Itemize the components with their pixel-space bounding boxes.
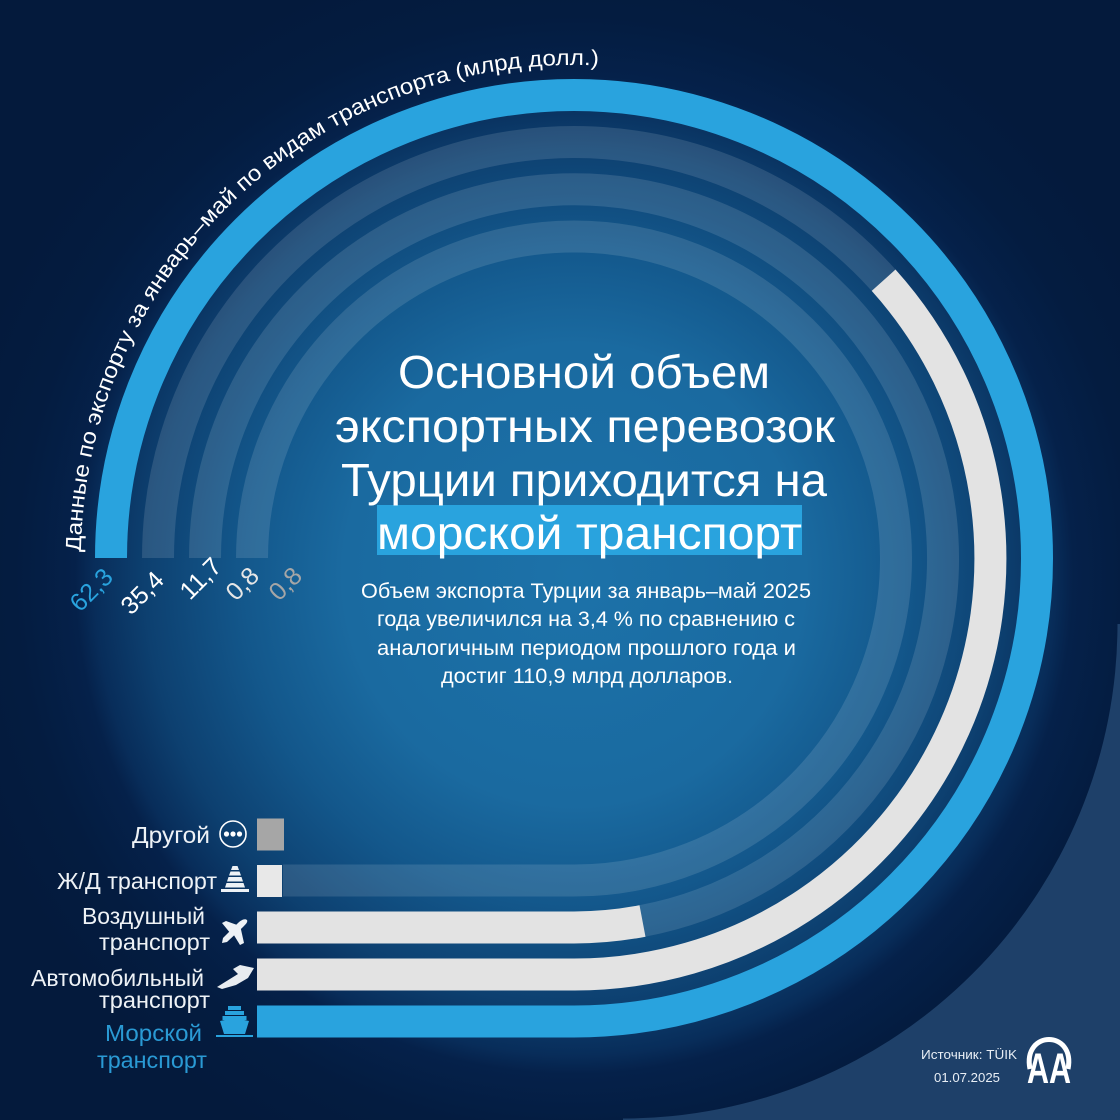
value: air: 11,7 (174, 552, 227, 605)
title line 2: экспортных перевозок (335, 400, 836, 452)
title (335, 346, 836, 559)
track: air (205, 189, 943, 921)
label: sea (97, 1020, 207, 1073)
value: automobile: 35,4 (115, 566, 170, 620)
logo: AA (1027, 1040, 1071, 1093)
bar: other 0,8 (257, 818, 284, 850)
label: air: транспорт (99, 929, 210, 955)
source text: Источник: TÜIK (921, 1047, 1017, 1062)
chart: radial bar chart (111, 95, 1037, 1022)
logo: AA: AA (1027, 1045, 1071, 1093)
bar: sea transport 62,3 (111, 95, 1037, 1022)
label: rail: Ж/Д транспорт (57, 868, 217, 894)
track: rail (252, 237, 896, 881)
icon: railway (221, 866, 249, 892)
title line 3: Турции приходится на (341, 454, 827, 506)
bar: automobile transport 35,4 (257, 280, 990, 975)
label: air: Воздушный (82, 903, 205, 929)
label: automobile: транспорт (99, 987, 210, 1013)
description line 3: аналогичным периодом прошлого года и (377, 637, 796, 660)
icon: road (217, 965, 254, 989)
title highlight (377, 505, 802, 555)
icon: plane (222, 919, 247, 945)
value: sea: 62,3 (64, 563, 119, 617)
bar: rail transport 0,8 (257, 865, 282, 897)
description line 2: года увеличился на 3,4 % по сравнению с (377, 608, 795, 631)
title line 4: морской транспорт (377, 507, 802, 559)
title line 1: Основной объем (398, 346, 770, 398)
date: 01.07.2025 (934, 1070, 1000, 1085)
value: rail: 0,8 (220, 562, 265, 606)
curved chart caption: Данные по экспорту за январь–май по видам транспорта (млрд долл.) (66, 49, 598, 552)
label: air (82, 903, 210, 955)
label: sea: Морской (105, 1020, 202, 1046)
bar: air transport 11,7 (257, 921, 642, 928)
description line 1: Объем экспорта Турции за январь–май 2025 (361, 580, 811, 603)
label: automobile (31, 965, 210, 1013)
description line 4: достиг 110,9 млрд долларов. (441, 665, 733, 688)
values rotated (64, 552, 308, 620)
label: other: Другой (132, 822, 210, 848)
track: automobile (158, 142, 884, 558)
value: other: 0,8 (263, 562, 308, 606)
label: automobile: Автомобильный (31, 965, 204, 991)
legend labels (31, 822, 217, 1073)
icon: ship (216, 1006, 253, 1037)
icon: other dots (220, 821, 246, 847)
label: sea: транспорт (97, 1047, 207, 1073)
description (361, 580, 811, 688)
